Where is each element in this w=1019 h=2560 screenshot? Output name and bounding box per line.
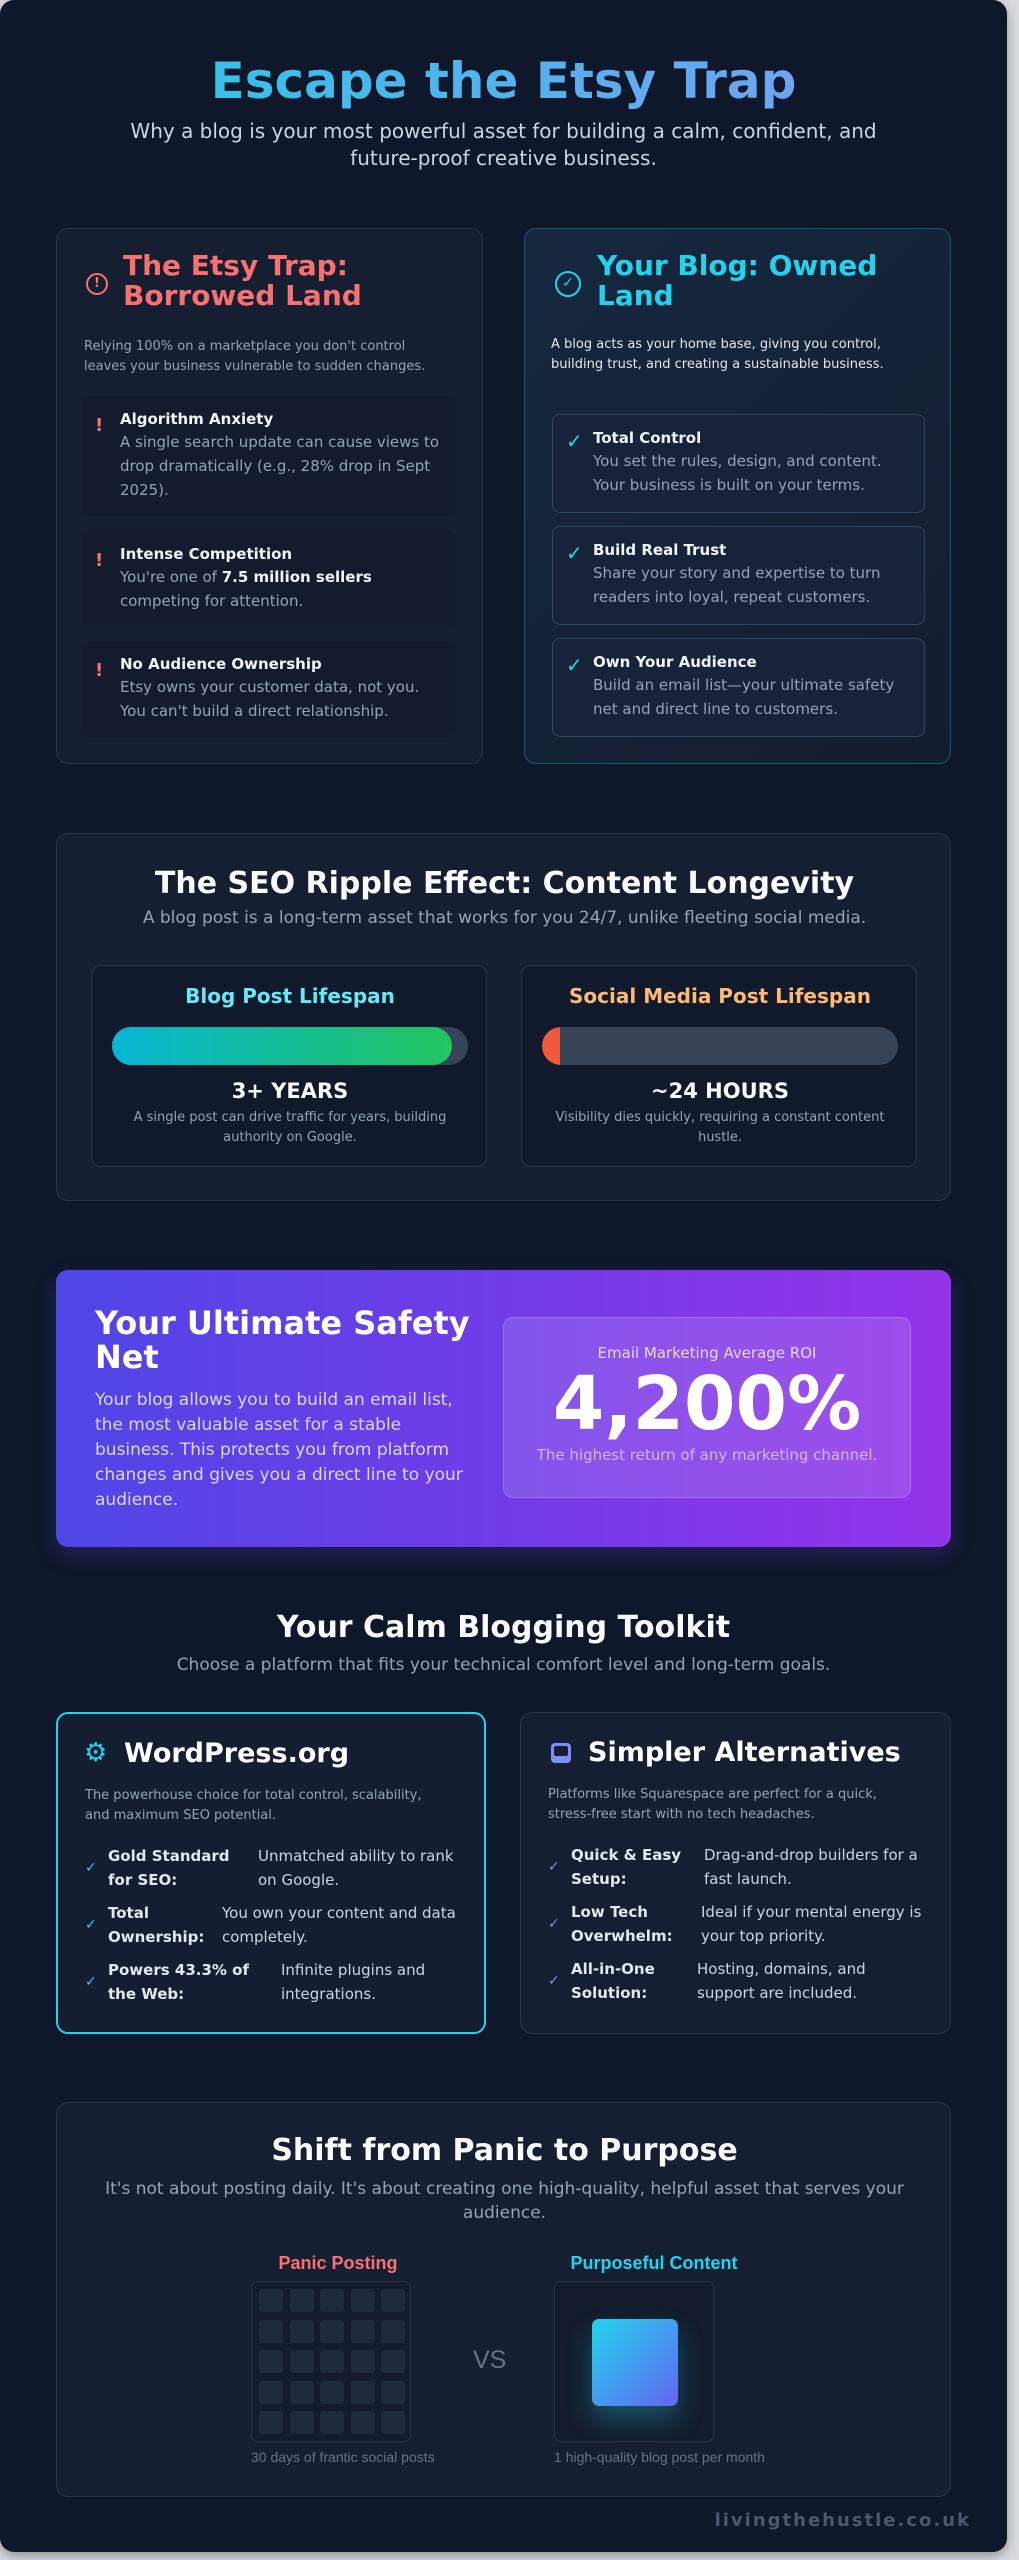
feature list: ✓ xyxy=(85,1860,97,1876)
item: competition: Intense Competition xyxy=(120,545,292,563)
icon: calendar grid xyxy=(251,2281,411,2442)
item: algorithm anxiety: Algorithm Anxiety xyxy=(120,410,273,428)
panel: simpler alternatives xyxy=(520,1712,951,2034)
item: competition: You're one of 7.5 million sellers competing for attention. xyxy=(120,568,372,610)
text: Your blog allows you to build an email list, the most valuable asset for a stable business. This protects you from platform changes and gives you a direct line to your audience. xyxy=(95,1390,463,1510)
heading: Simpler Alternatives xyxy=(588,1737,901,1768)
feature list: Gold Standard for SEO: xyxy=(108,1847,230,1889)
card: blog lifespan xyxy=(91,965,487,1167)
subtitle: It's not about posting daily. It's about creating one high-quality, helpful asset that serves your audience. xyxy=(105,2179,904,2223)
panel: SEO ripple xyxy=(56,833,951,1201)
item: audience: ✓ xyxy=(566,653,583,677)
item: trust: Build Real Trust xyxy=(593,541,726,559)
feature list: ✓ xyxy=(548,1859,560,1875)
heading: toolkit: Your Calm Blogging Toolkit xyxy=(277,1610,730,1645)
intro: Platforms like Squarespace are perfect for a quick, stress-free start with no tech headaches. xyxy=(548,1787,877,1822)
item: competition xyxy=(83,531,456,627)
feature list xyxy=(548,1846,921,2002)
heading xyxy=(596,249,877,312)
footer: website: livingthehustle.co.uk xyxy=(715,2510,971,2531)
icon: glowing blog post xyxy=(554,2281,714,2442)
item: control xyxy=(552,414,925,513)
panel: your blog xyxy=(524,228,951,764)
icon: check circle: ✓ xyxy=(562,275,574,291)
item: audience: ! xyxy=(95,660,103,681)
feature list: ✓ xyxy=(85,1917,97,1933)
bar chart: 3+ years xyxy=(112,1027,468,1065)
intro: The powerhouse choice for total control, scalability, and maximum SEO potential. xyxy=(85,1788,422,1823)
item: audience: Own Your Audience xyxy=(593,653,757,671)
icon: alert xyxy=(86,273,108,295)
item: competition: ! xyxy=(95,550,103,571)
label: panic: Panic Posting xyxy=(278,2253,398,2273)
stat: ROI: 4,200% xyxy=(553,1361,861,1447)
card: blog lifespan: A single post can drive traffic for years, building authority on Google. xyxy=(134,1110,446,1145)
heading: Land xyxy=(597,279,674,312)
caption: purposeful: 1 high-quality blog post per month xyxy=(554,2449,765,2465)
item: audience: Etsy owns your customer data, not you. You can't build a direct relationship. xyxy=(120,678,419,720)
subtitle: toolkit: Choose a platform that fits your technical comfort level and long-term goals. xyxy=(177,1655,830,1675)
card: social lifespan: Visibility dies quickly, requiring a constant content hustle. xyxy=(556,1110,884,1145)
stat: ROI: Email Marketing Average ROI xyxy=(598,1344,816,1362)
feature list: Quick & Easy Setup: xyxy=(571,1846,681,1888)
vs label: VS xyxy=(473,2346,506,2374)
item: audience: No Audience Ownership xyxy=(120,655,322,673)
title: Escape the Etsy Trap xyxy=(211,52,796,110)
subtitle: Why a blog is your most powerful asset for building a calm, confident, and future-proof creative business. xyxy=(130,119,877,170)
item: algorithm anxiety: ! xyxy=(95,415,103,436)
feature list: Drag-and-drop builders for a fast launch. xyxy=(704,1846,918,1888)
intro text: A blog acts as your home base, giving you control, building trust, and creating a sustainable business. xyxy=(551,337,884,372)
stat: ROI: The highest return of any marketing channel. xyxy=(537,1446,877,1464)
feature list: Ideal if your mental energy is your top priority. xyxy=(701,1903,921,1945)
feature list: Hosting, domains, and support are included. xyxy=(697,1960,866,2002)
feature list xyxy=(85,1847,456,2003)
heading: WordPress.org xyxy=(124,1738,349,1769)
intro text: Relying 100% on a marketplace you don't control leaves your business vulnerable to sudden changes. xyxy=(84,339,425,374)
heading: The SEO Ripple Effect: Content Longevity xyxy=(155,866,854,901)
card: blog lifespan: Blog Post Lifespan xyxy=(185,984,395,1008)
feature list: Unmatched ability to rank on Google. xyxy=(258,1847,454,1889)
heading: Shift from Panic to Purpose xyxy=(271,2133,738,2168)
panel: etsy trap xyxy=(56,228,483,764)
item: algorithm anxiety xyxy=(83,396,456,516)
item: audience xyxy=(83,641,456,737)
item: trust xyxy=(552,526,925,625)
icon: check circle xyxy=(555,271,581,297)
heading: Your Ultimate Safety Net xyxy=(95,1304,470,1376)
item: control: ✓ xyxy=(566,429,583,453)
card: blog lifespan: 3+ YEARS xyxy=(232,1079,348,1103)
panel: wordpress xyxy=(56,1712,486,2034)
card: social lifespan: ~24 HOURS xyxy=(651,1079,789,1103)
item: audience: Build an email list—your ultimate safety net and direct line to customers. xyxy=(593,676,894,718)
item: control: Total Control xyxy=(593,429,701,447)
heading: Borrowed Land xyxy=(123,279,362,312)
icon: gear: ⚙ xyxy=(84,1738,107,1768)
feature list: You own your content and data completely. xyxy=(222,1904,456,1946)
feature list: ✓ xyxy=(548,1916,560,1932)
panel: panic to purpose xyxy=(56,2102,951,2497)
caption: panic: 30 days of frantic social posts xyxy=(251,2449,435,2465)
icon: alert: ! xyxy=(94,276,100,291)
feature list: Powers 43.3% of the Web: xyxy=(108,1961,249,2003)
feature list: Infinite plugins and integrations. xyxy=(281,1961,425,2003)
feature list: All-in-One Solution: xyxy=(571,1960,655,2002)
feature list: Total Ownership: xyxy=(108,1904,204,1946)
item: trust: ✓ xyxy=(566,541,583,565)
feature list: ✓ xyxy=(548,1973,560,1989)
card: social lifespan: Social Media Post Lifespan xyxy=(569,984,871,1008)
icon: inbox xyxy=(551,1743,571,1763)
label: purposeful: Purposeful Content xyxy=(570,2253,738,2273)
heading: Your Blog: Owned xyxy=(597,249,877,282)
card: social lifespan xyxy=(521,965,917,1167)
stat: ROI xyxy=(503,1317,911,1498)
heading: The Etsy Trap: xyxy=(123,249,348,282)
panel: safety net banner xyxy=(56,1270,951,1547)
item: control: You set the rules, design, and content. Your business is built on your terms. xyxy=(593,452,882,494)
item: audience xyxy=(552,638,925,737)
bar chart: 24 hours xyxy=(542,1027,898,1065)
feature list: Low Tech Overwhelm: xyxy=(571,1903,673,1945)
heading xyxy=(123,249,362,312)
item: trust: Share your story and expertise to turn readers into loyal, repeat customers. xyxy=(593,564,880,606)
item: algorithm anxiety: A single search update can cause views to drop dramatically (e.g., 28% drop in Sept 2025). xyxy=(120,433,439,499)
feature list: ✓ xyxy=(85,1974,97,1990)
subtitle: A blog post is a long-term asset that works for you 24/7, unlike fleeting social media. xyxy=(143,908,866,928)
